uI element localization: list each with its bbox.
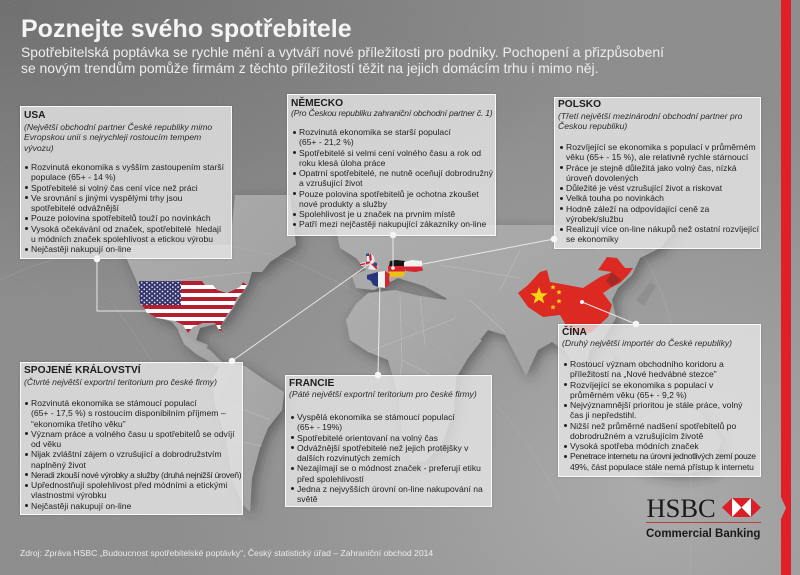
intro text: se novým trendům pomůže firmám z těchto příležitostí těžit na jejich domácím trhu i mimo něj. [21, 60, 598, 76]
panel: Spojené království [20, 362, 243, 515]
subtitle: USA [24, 122, 212, 152]
eurasia [335, 225, 680, 392]
list: Francie: (65+ - 19%) [297, 422, 342, 432]
list: Čína: Nejvýznamnější prioritou je stále práce, volný [570, 400, 742, 410]
panel: Polsko [554, 97, 761, 249]
list: USA: Pouze polovina spotřebitelů touží po novinkách [31, 213, 211, 223]
list: Spojené království [25, 398, 242, 510]
subtitle: Čína: (Druhý největší importér do České republiky) [562, 338, 732, 348]
subtitle: USA: Evropskou unii s nejrychleji rostoucím tempem [24, 132, 201, 142]
list: Spojené království: naplněný život [31, 460, 86, 470]
list: Německo: Spolehlivost je u značek na prvním místě [299, 209, 455, 219]
Poland flag [404, 260, 423, 272]
continents [120, 195, 722, 512]
list: Čína: Rozvíjející se ekonomika s populací v [570, 380, 713, 390]
China flag [518, 257, 633, 333]
list: Francie: Nezajímají se o módnost značek - preferují etiku [297, 463, 481, 473]
list: Německo: a vzrušující život [299, 178, 363, 188]
connector: United Kingdom [232, 260, 374, 361]
list: Čína: Nižší než průměrné nadšení spotřebitelů po [570, 420, 736, 430]
list: Francie: světě [297, 494, 318, 504]
australia [632, 400, 722, 474]
UK flag [360, 253, 379, 270]
heading: Spojené království: SPOJENÉ KRÁLOVSTVÍ [24, 365, 141, 376]
list: Čína: dobrodružném a vzrušujícím životě [570, 431, 703, 441]
list: Polsko: Realizují více on-line nákupů než ostatní rozvíjející [566, 224, 759, 234]
list: Polsko: úroveň dovolených [566, 173, 638, 183]
heading: Německo: NĚMECKO [291, 98, 343, 109]
connector: USA [94, 255, 150, 313]
panel: Německo [287, 94, 496, 236]
list: USA: Spotřebitelé si volný čas cení více než práci [31, 182, 198, 192]
list: USA: spotřebitelé odvážnější [31, 203, 119, 213]
intro text [21, 44, 664, 76]
list: Čína: Penetrace internetu na úrovni jednotlivých zemí pouze [570, 451, 756, 461]
connector: Poland [418, 239, 554, 265]
heading: USA: USA [24, 110, 46, 121]
connector: China [580, 300, 636, 324]
list: Polsko: se ekonomiky [566, 234, 619, 244]
panel: Francie [285, 375, 492, 507]
list: Čína [564, 359, 756, 472]
list: Francie: Odvážnější spotřebitelé než jejich protějšky v [297, 443, 468, 453]
France flag [367, 271, 390, 288]
list: Čína: průměrném věku (65+ - 9,2 %) [570, 390, 687, 400]
list: Čína: 49%, část populace stále nemá přístup k internetu [570, 462, 754, 472]
list: Spojené království: vlastnostmi výrobku [31, 490, 106, 500]
title: Poznejte svého spotřebitele [21, 15, 352, 43]
japan and islands [612, 282, 668, 396]
list: Polsko: Rozvíjející se ekonomika s populací v průměrném [566, 142, 756, 152]
north america [120, 195, 296, 352]
list: USA: Rozvinutá ekonomika s vyšším zastoupením starší [31, 162, 224, 172]
list: Německo [293, 127, 493, 229]
list: Německo: Patří mezi nejčastěji nakupující zákazníky on-line [299, 219, 486, 229]
list: Spojené království: Rozvinutá ekonomika se stámoucí populací [31, 398, 197, 408]
list: Spojené království: (65+ - 17,5 %) s rostoucím disponibilním příjmem – [31, 408, 226, 418]
list: Spojené království: Nejčastěji nakupují on-line [31, 500, 131, 510]
subtitle: Spojené království: (Čtvrté největší exportní teritorium pro české firmy) [24, 377, 217, 387]
list: Polsko: věku (65+ - 15 %), ale relativně rychle stárnoucí [566, 152, 748, 162]
list: Polsko: Hodně záleží na odpovídající ceně za [566, 204, 709, 214]
logo wordmark: HSBC [646, 493, 716, 523]
list: Polsko [560, 142, 759, 244]
list: USA: Nejčastěji nakupují on-line [31, 244, 131, 254]
list: Polsko: Velká touha po novinkách [566, 193, 664, 203]
HSBC logo [646, 493, 761, 540]
list: Spojené království: Nijak zvláštní zájem o vzrušující a dobrodružstvím [31, 449, 222, 459]
heading: Polsko: POLSKO [558, 99, 601, 110]
subtitle: USA: (Největší obchodní partner České republiky mimo [24, 122, 212, 132]
heading: Francie: FRANCIE [289, 378, 334, 389]
heading: Čína: ČÍNA [562, 327, 587, 338]
source note: Zdroj: Zpráva HSBC „Budoucnost spotřebitelské poptávky“, Český statistický úřad – Zahraniční obchod 2014 [20, 548, 433, 558]
connector: France [378, 282, 380, 375]
list: Německo: (65+ - 21,2 %) [299, 137, 354, 147]
list: Francie: Vyspělá ekonomika se stámoucí populací [297, 412, 455, 422]
list: USA [25, 162, 224, 254]
list: Francie: dalších rozvinutých zemích [297, 453, 400, 463]
red side bar [781, 0, 791, 575]
logo rule [646, 522, 761, 523]
panel: USA [20, 106, 232, 259]
logo division name: Commercial Banking [646, 528, 760, 540]
list: Čína: Vysoká spotřeba módních značek [570, 441, 699, 451]
list: Spojené království: Upřednostňují spolehlivost před módními a etickými [31, 480, 227, 490]
connector: Germany [391, 235, 395, 270]
list: Francie: Spotřebitelé orientovaní na volný čas [297, 432, 438, 442]
intro text: Spotřebitelská poptávka se rychle mění a vytváří nové příležitosti pro podniky. Pochopení a přizpůsobení [21, 44, 664, 60]
list: Spojené království: “ekonomika třetího věku” [31, 418, 126, 428]
list: Čína: čas ji nepředstihl. [570, 410, 636, 420]
list: Francie [291, 412, 483, 504]
list: Polsko: výrobek/službu [566, 214, 623, 224]
list: Spojené království: Neradi zkouší nové výrobky a služby (druhá nejnižší úroveň) [31, 470, 241, 480]
list: Spojené království: Význam práce a volného času u spotřebitelů se odvíjí [31, 429, 235, 439]
list: Spojené království: od věku [31, 439, 61, 449]
south america [212, 362, 284, 512]
list: Německo: Opatrní spotřebitelé, ne nutně oceňují dobrodružný [299, 168, 493, 178]
list: Čína: Rostoucí význam obchodního koridoru a [570, 359, 724, 369]
list: Německo: roku klesá úloha práce [299, 158, 385, 168]
subtitle: Polsko: (Třetí největší mezinárodní obchodní partner pro [558, 111, 742, 121]
USA flag [139, 281, 247, 333]
list: Polsko: Práce je stejně důležitá jako volný čas, nízká [566, 162, 737, 172]
subtitle: Francie: (Páté největší exportní teritorium pro české firmy) [289, 389, 477, 399]
list: USA: u módních značek spolehlivost a etickou výrobu [31, 234, 213, 244]
logo hexagon [722, 498, 761, 517]
list: Francie: Jedna z nejvyšších úrovní on-line nakupování na [297, 484, 483, 494]
list: Německo: nové produkty a služby [299, 199, 387, 209]
panel: Čína [558, 324, 761, 477]
list: USA: Ve srovnání s jinými vyspělými trhy jsou [31, 193, 182, 203]
list: Německo: Pouze polovina spotřebitelů je ochotna zkoušet [299, 188, 479, 198]
list: USA: Vysoká očekávání od značek, spotřebitelé hledají [31, 224, 221, 234]
list: Polsko: Důležité je vést vzrušující život a riskovat [566, 183, 722, 193]
list: Německo: Spotřebitelé si velmi cení volného času a rok od [299, 148, 481, 158]
Germany flag [388, 260, 405, 277]
list: Francie: před spolehlivostí [297, 474, 364, 484]
subtitle: Německo: (Pro Českou republiku zahraniční obchodní partner č. 1) [291, 108, 492, 118]
central america [178, 330, 232, 372]
country borders [140, 240, 600, 446]
africa [346, 290, 482, 462]
grid arcs [0, 242, 691, 575]
list: USA: populace (65+ - 14 %) [31, 172, 116, 182]
subtitle: USA: vývozu) [24, 142, 54, 152]
subtitle: Polsko [558, 111, 742, 131]
list: Čína: příležitostí na „Nové hedvábné stezce” [570, 369, 717, 379]
list: Německo: Rozvinutá ekonomika se starší populací [299, 127, 451, 137]
subtitle: Polsko: Českou republiku) [558, 121, 627, 131]
